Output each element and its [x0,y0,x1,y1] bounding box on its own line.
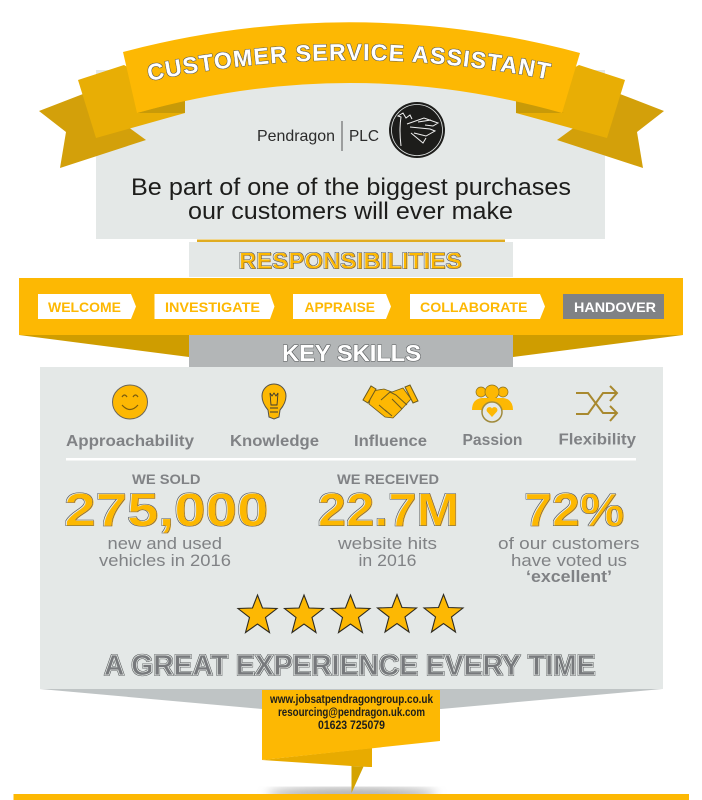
logo [257,102,445,158]
step: investigate: INVESTIGATE [165,299,260,315]
logo: Pendragon [257,128,335,145]
contact details: www.jobsatpendragongroup.co.uk [269,694,434,706]
stat: website hits [318,472,460,570]
skill labels [66,432,636,450]
step: handover [563,294,664,319]
stat: vehicles sold: new and used [108,534,222,553]
skill labels: Flexibility [558,432,636,448]
heading: responsibilities: RESPONSIBILITIES [240,248,462,274]
stat: website hits: in 2016 [358,551,416,570]
stat: website hits: 22.7M [318,484,460,536]
step: collaborate: COLLABORATE [420,299,528,315]
step: appraise [293,294,391,319]
skill labels: Passion [462,432,522,449]
contact banner [262,690,440,793]
step: investigate [154,294,274,319]
logo: PLC [349,128,379,145]
icon: dragon roundel [389,102,445,158]
skill labels: Knowledge [230,433,319,450]
icon: shuffle arrows [576,386,617,421]
icon: handshake [363,385,418,418]
ground shadow [267,788,437,800]
stat: customer rating [498,484,640,586]
icon: people with heart [472,385,513,422]
icon: light bulb [262,384,286,419]
panel: intro [96,70,605,239]
step: welcome [38,294,136,319]
contact details: resourcing@pendragon.uk.com [278,707,425,719]
stat: website hits: website hits [337,534,437,553]
stat: vehicles sold: WE SOLD [132,472,201,487]
panel: responsibilities heading [189,240,513,277]
skill labels: Approachability [66,433,194,450]
stat: customer rating: have voted us [511,551,627,570]
icon: smile [112,385,148,419]
step: handover: HANDOVER [574,299,656,315]
panel: lower grey fold [40,689,662,709]
skill labels: Influence [354,433,427,450]
slogan: A GREAT EXPERIENCE EVERY TIME [104,650,596,682]
panel: key skills heading [189,335,513,367]
title text: CUSTOMER SERVICE ASSISTANT [148,44,552,80]
contact details: 01623 725079 [318,720,385,732]
stat: vehicles sold [65,472,269,570]
stat: customer rating: ‘excellent’ [526,567,612,586]
tagline: Be part of one of the biggest purchases [131,174,571,201]
tagline [131,174,571,225]
five stars [238,594,463,632]
stat: vehicles sold: 275,000 [65,484,269,536]
tagline: our customers will ever make [188,198,513,225]
stat: customer rating: 72% [525,484,625,536]
step: welcome: WELCOME [48,299,121,315]
title ribbon [39,22,664,168]
panel: key skills and stats [40,367,663,689]
stat: website hits: WE RECEIVED [337,472,439,487]
stat: vehicles sold: vehicles in 2016 [99,551,231,570]
step: collaborate [410,294,545,319]
panel: responsibilities band [19,278,683,357]
panel: key skills heading: KEY SKILLS [282,340,421,366]
step: appraise: APPRAISE [304,299,375,315]
contact details [269,694,434,732]
stat: customer rating: of our customers [498,534,640,553]
bottom gold bar [14,794,689,800]
